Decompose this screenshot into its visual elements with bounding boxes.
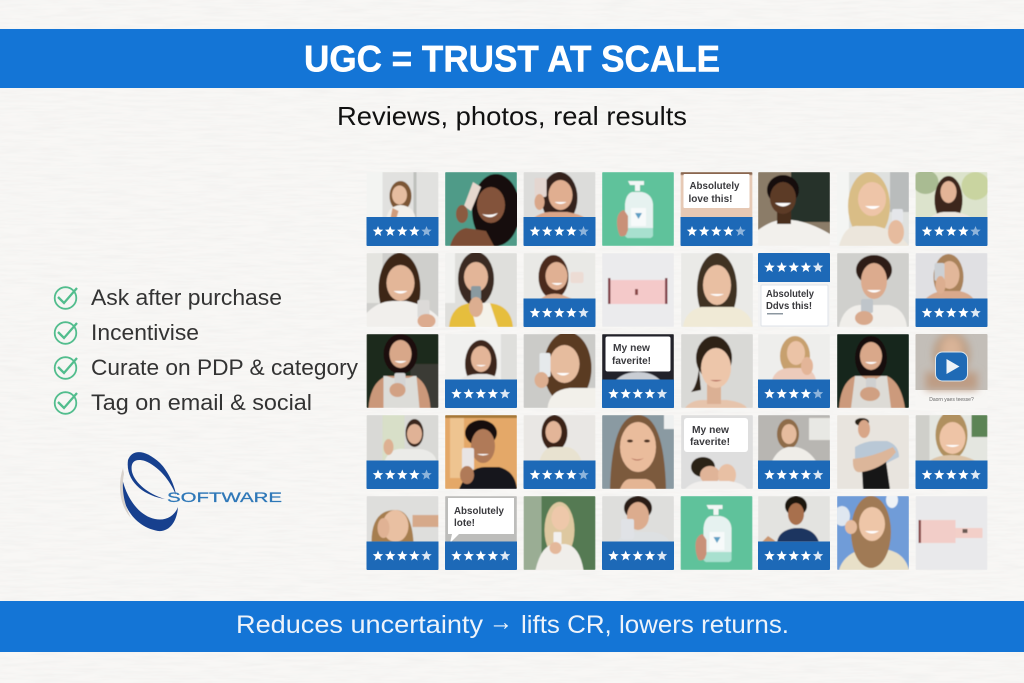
tile: smiling woman with banner xyxy=(916,411,988,490)
tile: woman with banner xyxy=(445,334,517,408)
footer banner: lifts CR, lowers returns. xyxy=(521,611,789,639)
checklist xyxy=(55,285,359,415)
tile: woman with card and banner xyxy=(524,253,596,328)
title banner: UGC = TRUST AT SCALE xyxy=(304,38,720,80)
tile: woman leaning head with banner xyxy=(366,496,438,570)
tile: blonde woman xyxy=(837,172,909,246)
tile: smiling man xyxy=(758,172,830,246)
tile: blonde among plants xyxy=(524,496,596,570)
tile: quote my new favorite xyxy=(602,334,674,408)
tile: woman on dark background xyxy=(366,334,438,408)
tile: man with phone and banner xyxy=(602,496,674,570)
footer banner: → xyxy=(489,608,513,636)
tile: man on orange background xyxy=(445,415,517,489)
footer banner xyxy=(0,601,1024,652)
tile: quote speech bubble: Absolutely xyxy=(454,505,504,517)
tile: banner on top with quote xyxy=(758,253,830,327)
tile: quote speech bubble xyxy=(445,496,517,570)
tile: woman portrait with updo xyxy=(681,334,753,408)
photo grid xyxy=(366,170,990,570)
tile: woman hiding behind phone xyxy=(916,253,988,328)
tile: quote love this: love this! xyxy=(688,193,732,205)
tile: pink product xyxy=(916,496,988,570)
tile: woman in tank on dark green xyxy=(837,334,909,408)
tile: woman on blue sky xyxy=(834,492,909,570)
subtitle: Reviews, photos, real results xyxy=(337,101,687,131)
tile: quote with two people: faverite! xyxy=(690,436,730,448)
tile: woman with phone and banner xyxy=(524,172,596,246)
tile: quote my new favorite: My new xyxy=(613,342,651,354)
tile: banner on top with quote: Ddvs this! xyxy=(766,300,812,312)
title banner xyxy=(0,29,1024,88)
tile: curly-haired man xyxy=(837,253,909,327)
tile: woman with wall and banner xyxy=(524,415,596,490)
tile: woman on teal background xyxy=(445,172,520,246)
tile: woman by window with banner xyxy=(366,415,438,490)
tile: quote speech bubble: lote! xyxy=(454,517,475,529)
item: tag on email and social: Tag on email & social xyxy=(91,390,312,415)
tile: woman with long hair xyxy=(366,253,438,328)
tile: quote love this xyxy=(680,172,752,246)
row 5 xyxy=(366,492,988,570)
tile: video with play button xyxy=(916,334,988,402)
tile: woman in room with banner xyxy=(758,415,830,490)
tile: closeup woman xyxy=(602,415,674,489)
tile: quote my new favorite: faverite! xyxy=(612,355,651,367)
tile: woman holding phone by cheek xyxy=(524,332,596,408)
row 4 xyxy=(366,411,988,490)
tile: man with dog xyxy=(837,415,909,489)
tile: woman in garden with banner xyxy=(912,170,990,246)
tile: green bottle product xyxy=(680,496,752,570)
logo wordmark: SOFTWARE xyxy=(167,489,282,505)
tile: woman portrait cream top xyxy=(681,253,753,327)
tile: blonde woman hugging phone xyxy=(758,334,830,408)
tile: quote with two people xyxy=(681,415,753,489)
tile: woman with 4.5 star banner xyxy=(366,172,438,246)
logo swoosh xyxy=(120,452,178,531)
tile: green bottle product xyxy=(602,172,674,246)
tile: pink product box xyxy=(602,253,674,327)
item: incentivise: Incentivise xyxy=(91,320,199,345)
row 3 xyxy=(366,332,988,408)
item: curate on PDP and category: Curate on PDP & category xyxy=(91,355,359,380)
tile: video with play button: Daorn yaes teesse? xyxy=(929,397,974,403)
tile: banner on top with quote: Absolutely xyxy=(766,288,814,300)
tile: quote love this: Absolutely xyxy=(690,180,740,192)
tile: quote with two people: My new xyxy=(692,424,730,436)
row 2 xyxy=(366,252,988,328)
logo: software xyxy=(120,452,282,531)
row 1 xyxy=(366,170,990,246)
item: ask after purchase: Ask after purchase xyxy=(91,285,282,310)
tile: man in navy shirt with banner xyxy=(758,496,830,570)
footer banner: Reduces uncertainty xyxy=(236,611,484,639)
tile: woman in yellow cardigan xyxy=(445,252,517,327)
